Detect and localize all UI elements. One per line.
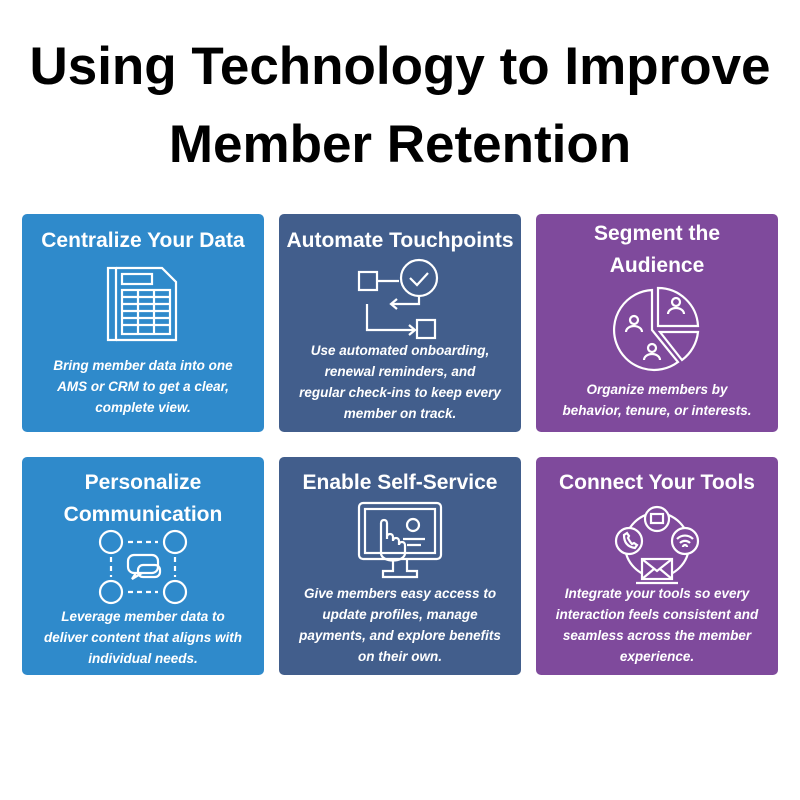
text: Give members easy access to (304, 586, 496, 601)
text: member on track. (344, 406, 456, 421)
icon: spreadsheet (106, 266, 178, 342)
text: interaction feels consistent and (556, 607, 758, 622)
text: individual needs. (88, 651, 198, 666)
text (53, 358, 233, 415)
panel: connect tools (536, 457, 778, 675)
text: Use automated onboarding, (311, 343, 489, 358)
icon: touch screen (358, 502, 442, 578)
text (44, 609, 242, 666)
heading: Centralize Your Data (41, 229, 245, 252)
heading: Connect Your Tools (559, 471, 755, 494)
text: behavior, tenure, or interests. (562, 403, 752, 418)
heading: Communication (64, 503, 222, 526)
text: regular check-ins to keep every (299, 385, 501, 400)
icon: pie chart people (612, 286, 700, 372)
icon: workflow (358, 258, 438, 340)
heading (594, 222, 720, 277)
heading: Personalize (85, 471, 201, 494)
heading: Enable Self-Service (303, 471, 497, 494)
title: Using Technology to Improve (29, 37, 771, 96)
text: on their own. (358, 649, 442, 664)
title (29, 37, 771, 174)
text: renewal reminders, and (325, 364, 475, 379)
icon: people chat (98, 530, 188, 604)
panel: personalize communication (22, 457, 264, 675)
text (556, 586, 758, 664)
text: Leverage member data to (61, 609, 225, 624)
panel: enable self-service (279, 457, 521, 675)
text: complete view. (95, 400, 191, 415)
text: AMS or CRM to get a clear, (57, 379, 229, 394)
heading: Segment the (594, 222, 720, 245)
icon: connected channels (614, 506, 700, 584)
heading (64, 471, 222, 526)
text: seamless across the member (563, 628, 751, 643)
text (298, 586, 501, 664)
text: deliver content that aligns with (44, 630, 242, 645)
text: payments, and explore benefits (299, 628, 501, 643)
text (299, 343, 502, 421)
text: Integrate your tools so every (565, 586, 749, 601)
text: experience. (620, 649, 694, 664)
heading: Automate Touchpoints (286, 229, 514, 252)
heading: Audience (610, 254, 704, 277)
panel: segment audience (536, 214, 778, 432)
panel: centralize data (22, 214, 264, 432)
text: Bring member data into one (53, 358, 233, 373)
text: Organize members by (586, 382, 728, 397)
panel: automate touchpoints (279, 214, 521, 432)
text: update profiles, manage (322, 607, 478, 622)
title: Member Retention (169, 115, 631, 174)
text (562, 382, 752, 418)
